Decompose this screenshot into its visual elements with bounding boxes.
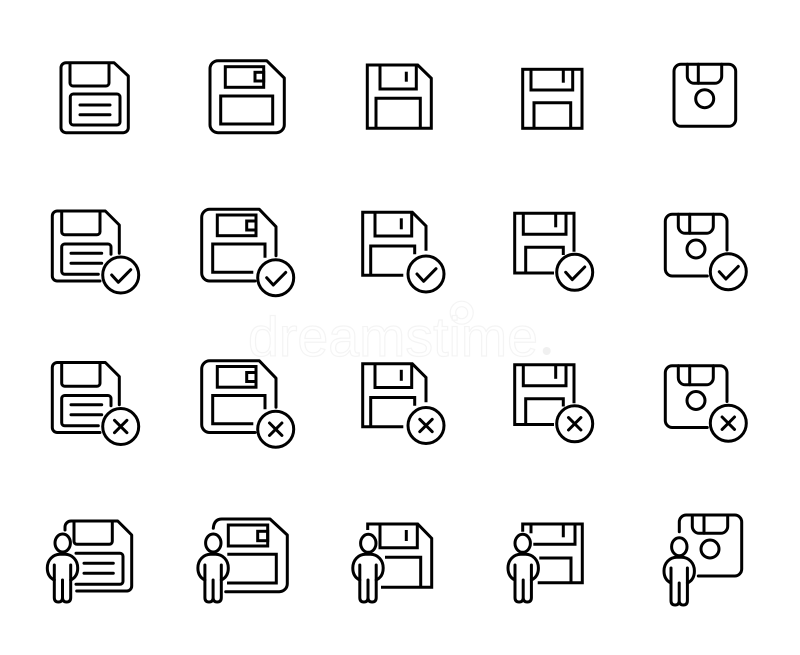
icon: rounded square disk with hub xyxy=(674,64,736,126)
icon: plain square floppy with person xyxy=(508,524,582,602)
icon: floppy with tab and cross xyxy=(202,361,294,447)
icon: square floppy with check xyxy=(363,212,444,292)
icon: floppy with tab and person xyxy=(198,519,287,602)
icon: rounded disk with cross xyxy=(665,366,746,441)
row 3: floppy disks with cross badge xyxy=(52,361,746,447)
icon: floppy with tab and check xyxy=(202,209,294,296)
icon: rounded floppy with cross xyxy=(52,362,139,444)
icon: rounded floppy with check xyxy=(52,211,139,293)
watermark: dreamstime xyxy=(248,305,538,368)
icon: square floppy without chamfer xyxy=(523,69,582,128)
icon: rounded disk with person xyxy=(664,515,742,605)
icon: rounded disk with check xyxy=(665,214,746,290)
icon: rounded floppy with label lines xyxy=(61,63,128,133)
icon: floppy with side tab xyxy=(210,61,284,133)
icon: plain square floppy with cross xyxy=(515,365,593,442)
icon: rounded floppy with person xyxy=(47,521,132,602)
icon: square floppy with cross xyxy=(363,364,444,444)
row 4: floppy disks with person xyxy=(47,515,742,605)
icon: plain square floppy with check xyxy=(515,213,593,290)
row 1: plain floppy disks xyxy=(61,61,736,133)
icon: square floppy with chamfer xyxy=(367,65,431,128)
row 2: floppy disks with check badge xyxy=(52,209,746,296)
icon: square floppy with person xyxy=(353,524,432,602)
